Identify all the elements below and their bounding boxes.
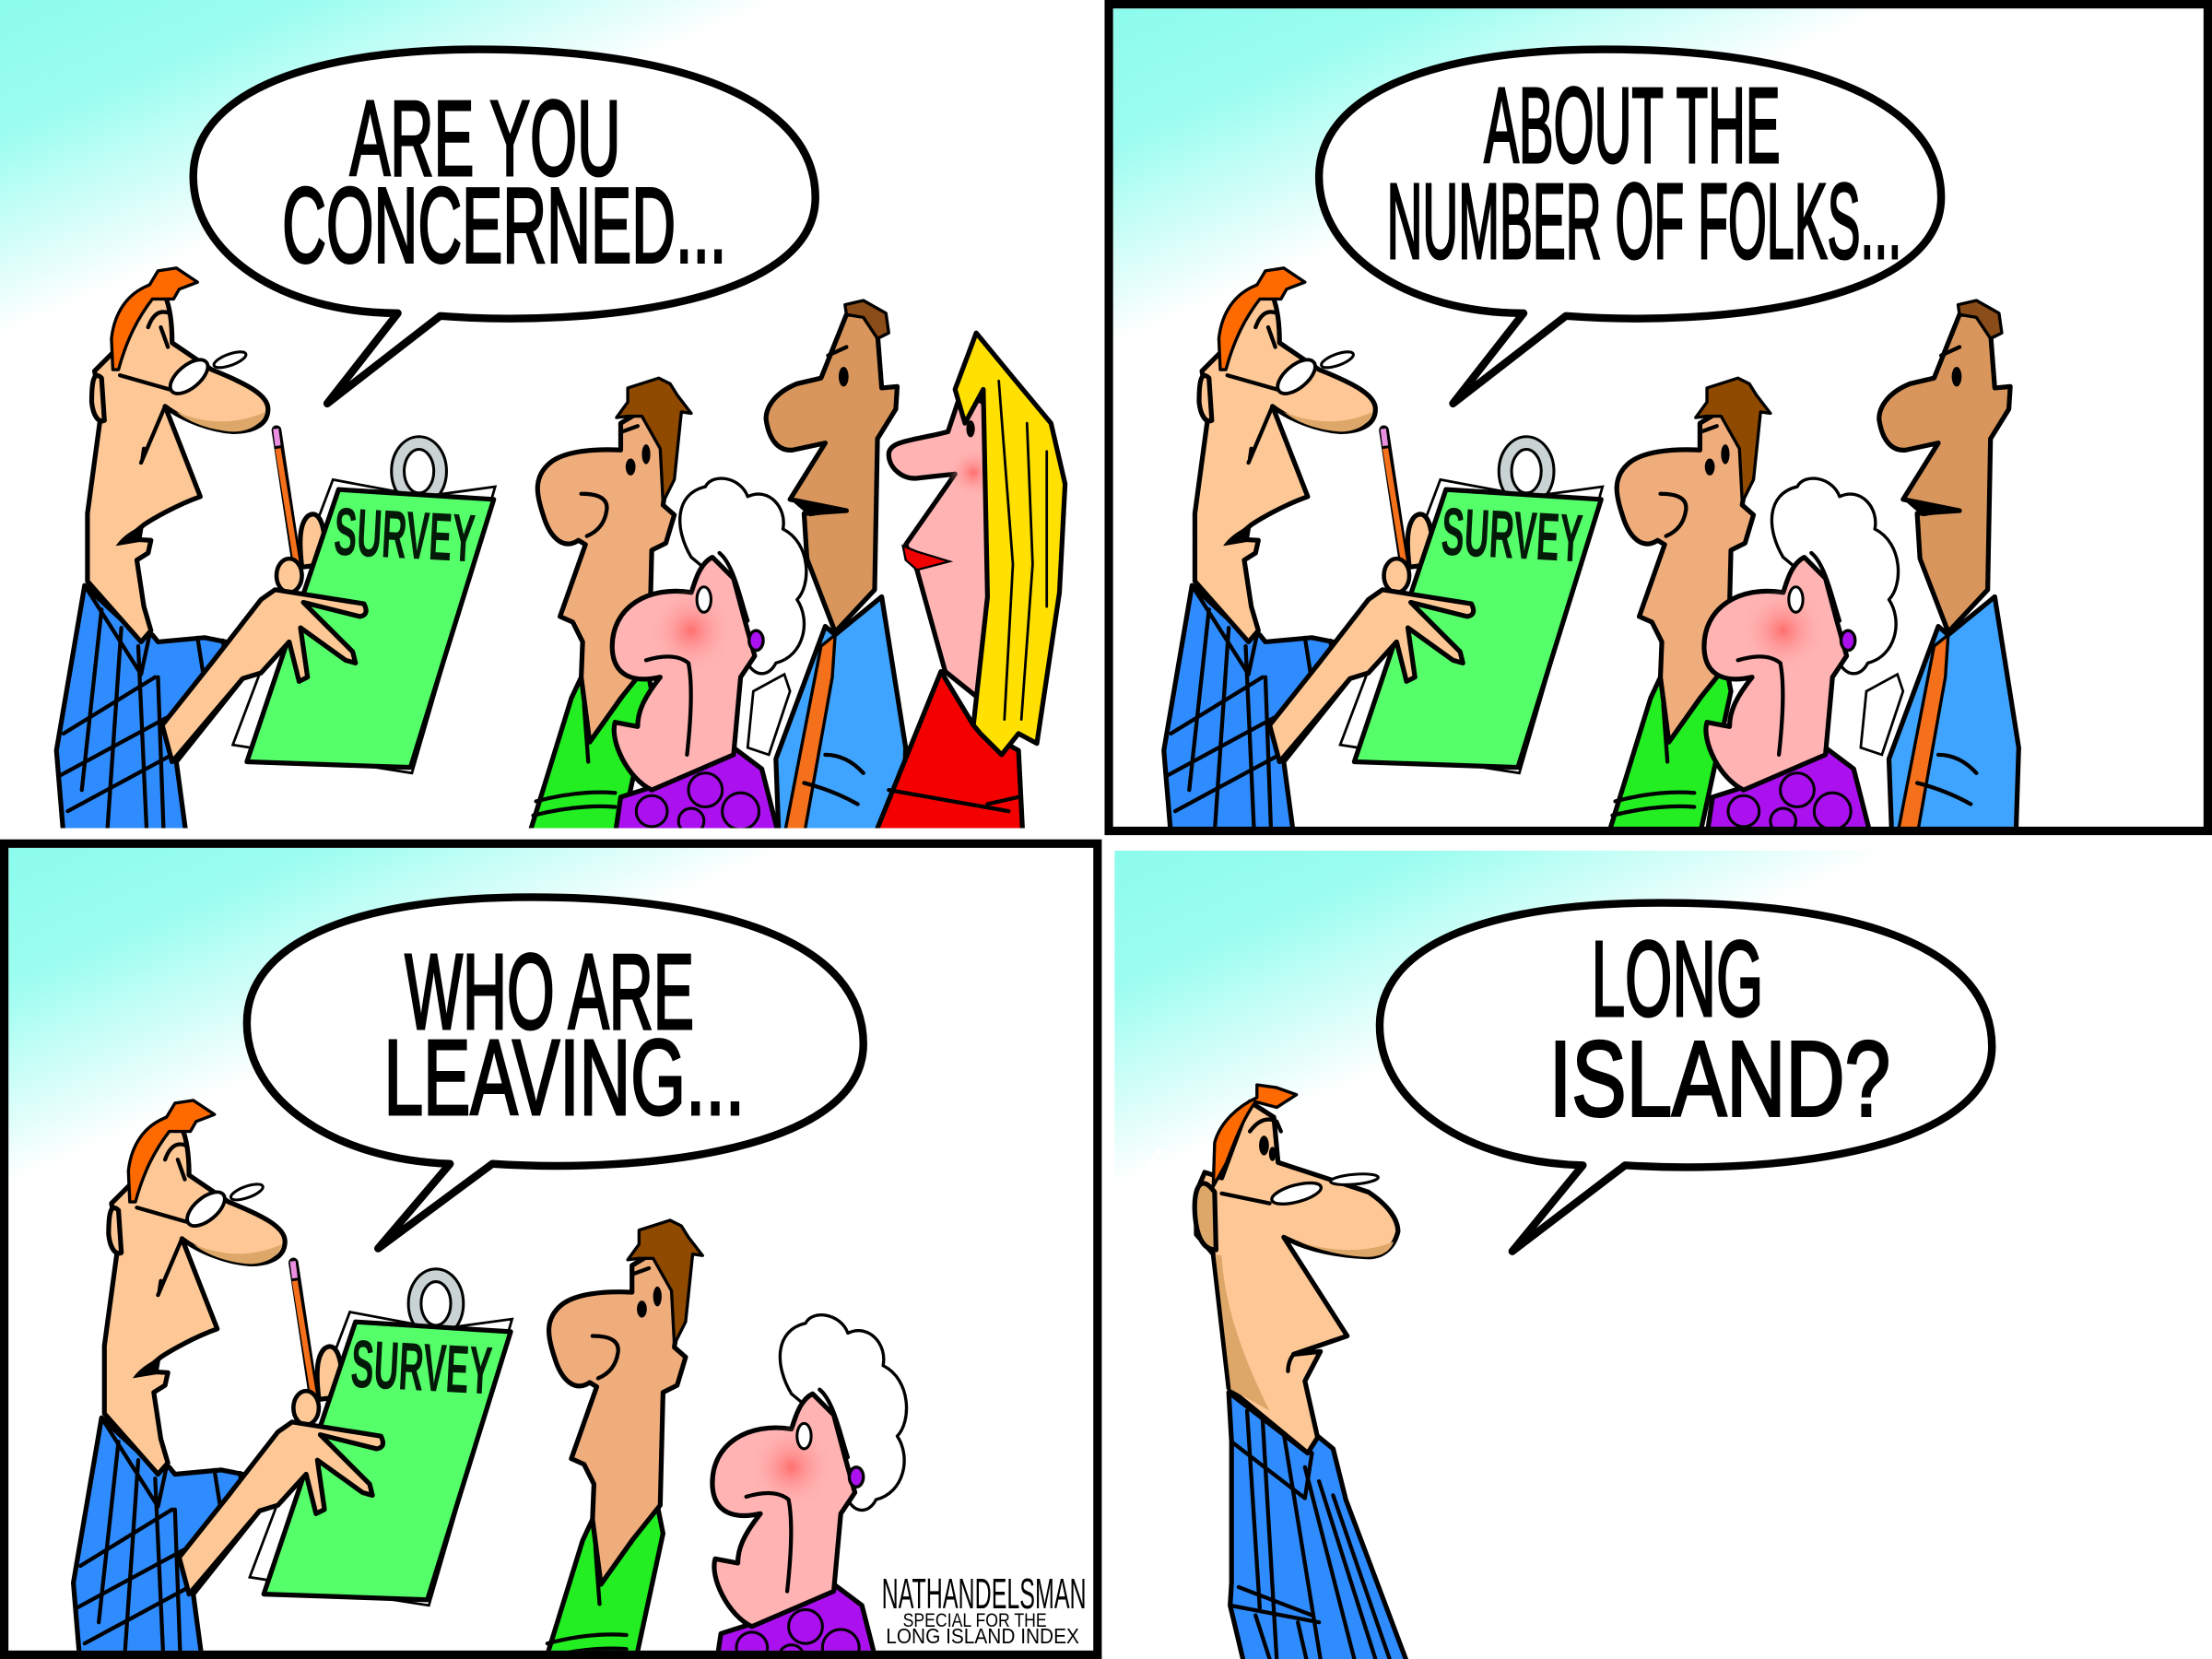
figure: old lady in purple: [1704, 478, 1899, 835]
panel: about the number of folks: [1113, 8, 2021, 827]
speech bubble: who are leaving: LEAVING...: [383, 1018, 745, 1137]
sky gradient: [8, 848, 754, 1169]
speech bubble: who are leaving: [247, 897, 864, 1249]
sky gradient: [1114, 851, 2212, 1659]
speech bubble: who are leaving: WHO ARE: [405, 932, 694, 1052]
figure: surveyor with clipboard: [56, 268, 495, 835]
figure: man in green shirt: [529, 378, 691, 835]
figure: man in green shirt: [540, 1220, 702, 1659]
speech bubble: are you concerned: [194, 50, 816, 404]
figure: blonde woman in red: [875, 333, 1065, 835]
figure: surveyor with clipboard: SURVEY: [332, 493, 477, 577]
figure: surveyor with clipboard: SURVEY: [349, 1325, 494, 1409]
signature: [882, 1570, 1087, 1648]
figure: man in blue shirt and tie: [747, 300, 906, 835]
speech bubble: long island: [1380, 903, 1992, 1252]
speech bubble: long island: LONG: [1592, 919, 1763, 1039]
figure: man in blue shirt and tie: [1861, 300, 2018, 835]
speech bubble: are you concerned: ARE YOU: [350, 78, 620, 198]
figure: surveyor with clipboard: [74, 1100, 512, 1659]
panel: are you concerned: [0, 0, 1100, 835]
frame: panel 3: [5, 843, 1098, 1654]
figure: man in green shirt: [1608, 378, 1771, 835]
signature: NATHANDELSMAN: [882, 1570, 1087, 1618]
speech bubble: about the number of folks: [1319, 50, 1941, 404]
sky gradient: [1113, 8, 1857, 330]
speech bubble: long island: ISLAND?: [1549, 1019, 1890, 1139]
frame: panel 2: [1109, 5, 2207, 831]
figure: old lady in purple: [612, 478, 806, 835]
speech bubble: about the number of folks: ABOUT THE: [1484, 65, 1781, 185]
motion lines: [1132, 1149, 1181, 1234]
signature: SPECIAL FOR THE: [903, 1609, 1047, 1631]
signature: LONG ISLAND INDEX: [886, 1624, 1079, 1648]
sky gradient: [0, 0, 745, 321]
panel: who are leaving: [8, 848, 1109, 1659]
figure: surveyor facing forward: [1194, 1085, 1408, 1659]
figure: old lady in purple: [712, 1315, 907, 1659]
figure: surveyor with clipboard: SURVEY: [1440, 493, 1584, 577]
panel: long island: [1114, 851, 2212, 1659]
figure: surveyor with clipboard: [1164, 268, 1603, 835]
speech bubble: are you concerned: CONCERNED...: [282, 166, 726, 286]
